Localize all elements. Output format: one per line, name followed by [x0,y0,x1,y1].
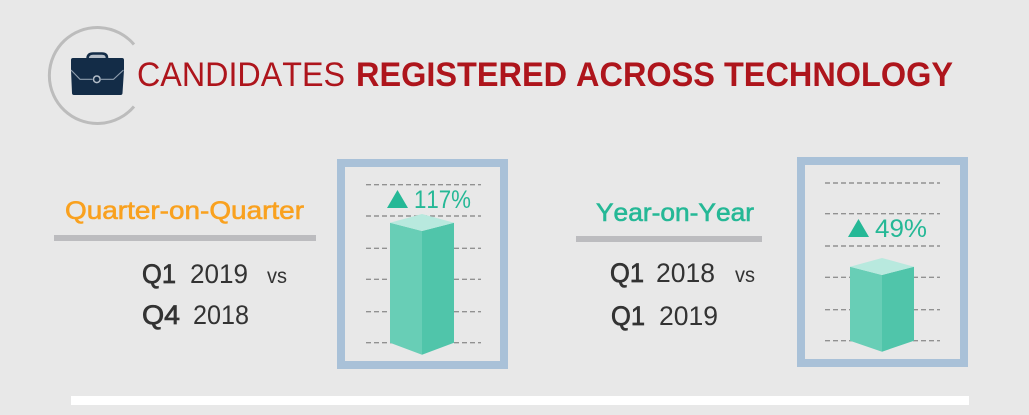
text block: Q1 2019 vs Q4 2018 [142,259,287,330]
icon: briefcase in open circle [49,28,134,124]
text block: Q1 2019 vs Q4 2018: 2019 [190,259,248,289]
value: up 117%: 117% [414,186,471,214]
panel: year-on-year chart [801,161,964,363]
text block: Q1 2019 vs Q4 2018: 2018 [193,300,249,330]
text block: Q1 2018 vs Q1 2019: Q1 [610,258,644,288]
value: up 117% [387,186,471,214]
gridlines [366,185,481,343]
rule: year heading underline [576,236,762,242]
title: REGISTERED ACROSS TECHNOLOGY [356,56,953,94]
title: CANDIDATES [137,56,345,94]
text block: Q1 2019 vs Q4 2018: vs [267,265,287,288]
text block: Q1 2018 vs Q1 2019: 2018 [656,258,715,288]
value: up 49%: 49% [875,215,927,243]
text block: Q1 2018 vs Q1 2019 [610,258,755,331]
bar: 117% [390,214,454,355]
text block: Q1 2019 vs Q4 2018: Q4 [142,300,180,330]
gridlines [825,183,940,341]
panel: quarter-on-quarter chart [341,163,504,365]
footer white bar [71,396,969,405]
text block: Q1 2018 vs Q1 2019: 2019 [659,301,718,331]
bar: 49% [850,258,914,352]
text block: Q1 2018 vs Q1 2019: Q1 [611,301,645,331]
rule: quarter heading underline [54,235,316,241]
text block: Q1 2019 vs Q4 2018: Q1 [142,259,176,289]
value: up 49% [848,215,927,243]
text block: Q1 2018 vs Q1 2019: vs [735,264,755,287]
heading: Quarter-on-Quarter: Quarter-on-Quarter [65,197,304,225]
heading: Year-on-Year: Year-on-Year [596,199,754,227]
